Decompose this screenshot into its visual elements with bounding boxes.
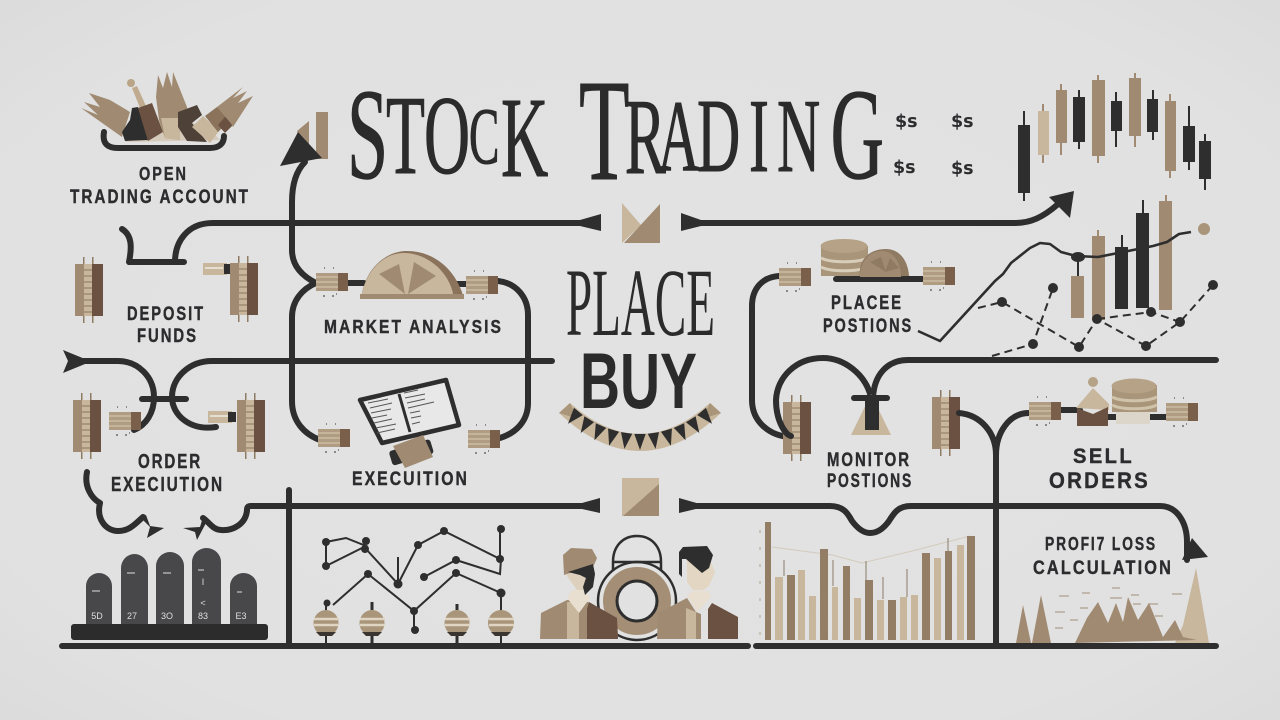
title: D bbox=[697, 79, 740, 194]
icon: deposit block left bbox=[75, 257, 103, 323]
flow lines top left bbox=[122, 112, 601, 440]
label: deposit funds: DEPOSIT bbox=[127, 304, 205, 325]
icon: open account feathers bbox=[81, 72, 253, 148]
icon: candlestick and line chart bbox=[918, 195, 1218, 356]
label: sell orders bbox=[1049, 445, 1150, 493]
icon: envelope and hat bbox=[1076, 377, 1109, 426]
center heading: place buy bbox=[566, 249, 715, 425]
icon: monitor block right bbox=[932, 390, 960, 456]
icon: top diamond bbox=[622, 203, 660, 243]
label: open trading account: OPEN bbox=[139, 164, 188, 184]
title: K bbox=[501, 75, 548, 202]
icon: tablets on base bbox=[71, 548, 268, 640]
icon: right connector bbox=[468, 425, 500, 453]
order execution group bbox=[73, 393, 265, 496]
icon: bottom diamond bbox=[622, 478, 659, 516]
icon: tablets on base: 83 bbox=[198, 611, 208, 621]
icon: order block right bbox=[208, 393, 265, 459]
person left bbox=[540, 548, 618, 639]
icon: open book bbox=[360, 380, 459, 468]
dollar signs: $s bbox=[951, 112, 974, 132]
icon: two people and lock bbox=[540, 536, 738, 640]
title: I bbox=[749, 79, 769, 194]
label: open trading account: TRADING ACCOUNT bbox=[70, 187, 250, 208]
deposit funds group bbox=[75, 256, 258, 347]
label: order execution bbox=[111, 451, 224, 496]
icon: bunting bbox=[559, 403, 721, 451]
dollar signs: $s bbox=[893, 158, 916, 178]
title: C bbox=[469, 93, 499, 181]
icon: database bbox=[1112, 378, 1157, 424]
placee positions group bbox=[752, 239, 955, 437]
dollar signs bbox=[893, 112, 974, 179]
label: sell orders: SELL bbox=[1073, 445, 1134, 468]
left mid flow lines bbox=[63, 350, 292, 430]
title: T bbox=[579, 50, 629, 211]
icon: tablets on base: 3O bbox=[161, 611, 173, 621]
label: profit loss calculation: CALCULATION bbox=[1033, 558, 1173, 579]
market analysis loop bbox=[292, 251, 552, 438]
label: placee positions: POSTIONS bbox=[823, 316, 913, 337]
title: T bbox=[386, 73, 425, 198]
icon: left connector bbox=[316, 268, 348, 296]
label: monitor positions: POSTIONS bbox=[827, 471, 913, 492]
sell orders group bbox=[959, 377, 1198, 493]
icon: tablets on base: 27 bbox=[127, 611, 137, 621]
label: sell orders: ORDERS bbox=[1049, 468, 1150, 493]
icon: spinning tops bbox=[314, 602, 514, 645]
label: open trading account bbox=[70, 164, 250, 208]
right arrow line bbox=[681, 191, 1074, 231]
icon: right connector bbox=[1166, 398, 1198, 426]
icon: right connector bbox=[466, 271, 498, 299]
icon: monitor block left bbox=[783, 395, 811, 461]
dollar signs: $s bbox=[895, 112, 918, 132]
label: monitor positions: MONITOR bbox=[827, 450, 911, 471]
icon: tablets on base: E3 bbox=[235, 611, 247, 621]
icon: mountain area chart bbox=[1016, 568, 1209, 643]
icon: tablets on base: 5D bbox=[91, 611, 103, 621]
icon: bell cone bbox=[851, 394, 891, 435]
icon: left connector bbox=[1029, 397, 1061, 425]
icon: network nodes bbox=[322, 525, 506, 634]
icon: left connector bbox=[318, 424, 350, 452]
label: execution: EXECUITION bbox=[352, 469, 469, 490]
title: G bbox=[830, 63, 884, 206]
icon: left connector bbox=[779, 263, 811, 291]
bottom right flow line bbox=[679, 498, 1208, 560]
title: S bbox=[347, 63, 388, 206]
person right bbox=[657, 546, 738, 639]
icon: right connector bbox=[923, 262, 955, 290]
label: monitor positions bbox=[827, 450, 913, 492]
icon: tablets on base: < bbox=[200, 598, 206, 608]
lock bbox=[598, 536, 676, 640]
bottom baseline and verticals bbox=[62, 450, 1216, 646]
icon: coin stack bbox=[820, 239, 909, 277]
icon: tablets on base: I bbox=[202, 577, 204, 587]
label: placee positions: PLACEE bbox=[831, 293, 903, 314]
execution group bbox=[318, 380, 500, 490]
icon: protractor bbox=[360, 251, 464, 299]
title: O bbox=[424, 73, 470, 198]
monitor positions group bbox=[776, 358, 1216, 492]
label: order execution: EXECIUTION bbox=[111, 474, 224, 496]
center heading: place buy: BUY bbox=[580, 336, 697, 425]
label: placee positions bbox=[823, 293, 913, 337]
title: A bbox=[658, 79, 700, 192]
icon: candlestick row bbox=[1018, 73, 1211, 201]
wavy arrows to tablets bbox=[86, 472, 600, 540]
text: PLACE bbox=[566, 249, 715, 356]
icon: deposit block right bbox=[203, 256, 258, 322]
label: deposit funds bbox=[127, 304, 205, 347]
dollar signs: $s bbox=[951, 159, 974, 179]
icon: order block left bbox=[73, 393, 141, 459]
label: market analysis: MARKET ANALYSIS bbox=[324, 316, 503, 337]
label: order execution: ORDER bbox=[138, 451, 202, 473]
bar chart bbox=[760, 522, 975, 640]
label: deposit funds: FUNDS bbox=[137, 326, 198, 347]
label: profit loss calculation: PROFI7 LOSS bbox=[1045, 533, 1157, 554]
title bbox=[347, 50, 884, 211]
title: N bbox=[777, 79, 820, 194]
title: R bbox=[625, 78, 666, 198]
label: profit loss calculation bbox=[1033, 533, 1173, 579]
